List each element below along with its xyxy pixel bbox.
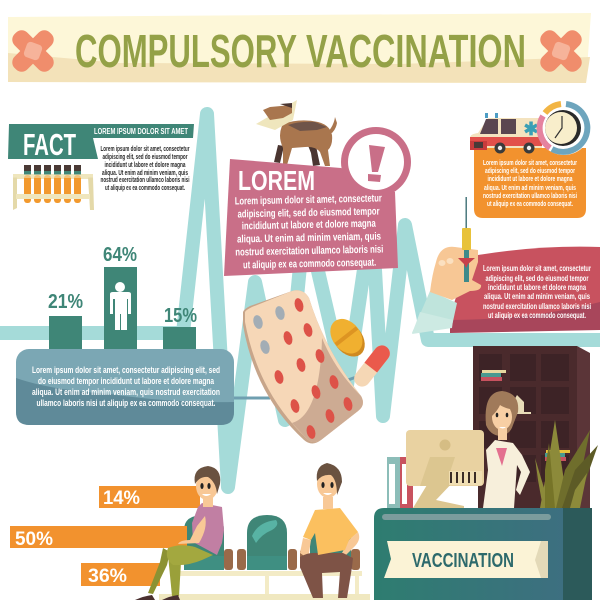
ECG heartbeat line <box>0 114 600 487</box>
fact subheading: LOREM IPSUM DOLOR SIT AMET <box>94 127 188 136</box>
panel: blue text box: Lorem ipsum dolor sit amet, consectetur adipiscing elit, sed <box>32 365 220 375</box>
icon: ambulance: ✱ <box>523 119 539 139</box>
icon: ambulance <box>470 113 542 154</box>
fact text block <box>100 146 190 192</box>
computer monitor <box>406 430 484 508</box>
chair left <box>184 515 233 570</box>
lorem text block: nostrud exercitation ullamco laboris nisi <box>235 243 383 259</box>
fact text block: aliqua. Ut enim ad minim veniam, quis <box>102 170 188 177</box>
panel: orange text box <box>474 148 586 218</box>
title text: COMPULSORY <box>75 25 297 77</box>
vaccination sign <box>384 541 548 578</box>
man seated left <box>135 466 224 600</box>
waiting room chairs <box>159 515 370 600</box>
bar 21% <box>49 316 82 350</box>
books top shelf <box>481 370 506 381</box>
vaccination sign: VACCINATION <box>412 550 514 572</box>
fact text block: incididunt ut labore et dolore magna <box>104 162 186 169</box>
icon: yellow tablet <box>324 313 372 363</box>
orange bar 36%: 36% <box>88 566 127 587</box>
icon: hand with syringe <box>412 197 481 334</box>
lorem heading: LOREM <box>238 165 315 196</box>
orange bar 36% <box>81 563 160 587</box>
icon: dog with cone collar <box>256 100 337 166</box>
vase <box>513 395 531 414</box>
icon: plaster left <box>9 27 57 75</box>
orange bar 14% <box>99 486 200 509</box>
bookcase <box>473 346 590 508</box>
title banner <box>8 13 591 83</box>
panel: blue text box: do eiusmod tempor incididunt ut labore et dolore magna <box>38 376 215 386</box>
panel: lorem callout <box>224 127 411 276</box>
bar chart <box>48 244 197 350</box>
panel: blue text box <box>16 349 234 425</box>
chair right <box>300 515 360 570</box>
icon: person <box>110 282 131 330</box>
panel: crimson text band <box>450 247 600 333</box>
lorem text block: incididunt ut labore et dolore magna <box>242 218 376 232</box>
panel: fact <box>8 124 194 192</box>
warning circle <box>341 127 411 197</box>
label 15%: 15% <box>164 305 197 327</box>
bar 64% <box>104 267 137 350</box>
man seated right <box>300 463 359 598</box>
lorem text block <box>234 192 384 272</box>
lorem text block: Lorem ipsum dolor sit amet, consectetur <box>235 192 382 208</box>
connector lines <box>234 375 362 398</box>
icon: clock with ring chart <box>537 101 591 155</box>
orange bar 50% <box>10 526 187 550</box>
icon: test tube rack <box>13 165 94 210</box>
lorem text block: ut aliquip ex ea commodo consequat. <box>243 257 376 271</box>
woman doctor <box>483 391 530 508</box>
fact text block: Lorem ipsum dolor sit amet, consectetur <box>100 146 190 153</box>
lorem text block: adipiscing elit, sed do eiusmod tempor <box>237 206 380 220</box>
reception desk <box>374 508 592 600</box>
lorem text block: aliqua. Ut enim ad minim veniam, quis <box>237 230 381 246</box>
books lower shelf <box>545 450 570 461</box>
panel: blue text box: ullamco laboris nisi ut aliquip ex ea commodo consequat. <box>36 398 216 408</box>
orange bar 50%: 50% <box>15 529 53 550</box>
icon: capsule <box>351 342 393 390</box>
binders <box>387 457 413 508</box>
bar 15% <box>163 327 196 350</box>
chair middle <box>237 515 297 570</box>
orange bar 14%: 14% <box>103 488 140 509</box>
fact text block: adipiscing elit, sed do eiusmod tempor <box>102 154 188 161</box>
icon: plaster right <box>537 27 585 75</box>
fact heading: FACT <box>23 127 76 162</box>
panel: blue text box: aliqua. Ut enim ad minim veniam, quis nostrud exercitation <box>32 387 220 397</box>
icon: blister pack <box>243 290 363 444</box>
label 64%: 64% <box>103 244 137 266</box>
label 21%: 21% <box>48 291 83 313</box>
icon: potted plant <box>535 420 598 508</box>
fact text block: ut aliquip ex ea commodo consequat. <box>105 185 185 192</box>
fact text block: nostrud exercitation ullamco laboris nisi <box>100 177 190 184</box>
bench <box>180 571 362 576</box>
floor <box>159 594 370 600</box>
